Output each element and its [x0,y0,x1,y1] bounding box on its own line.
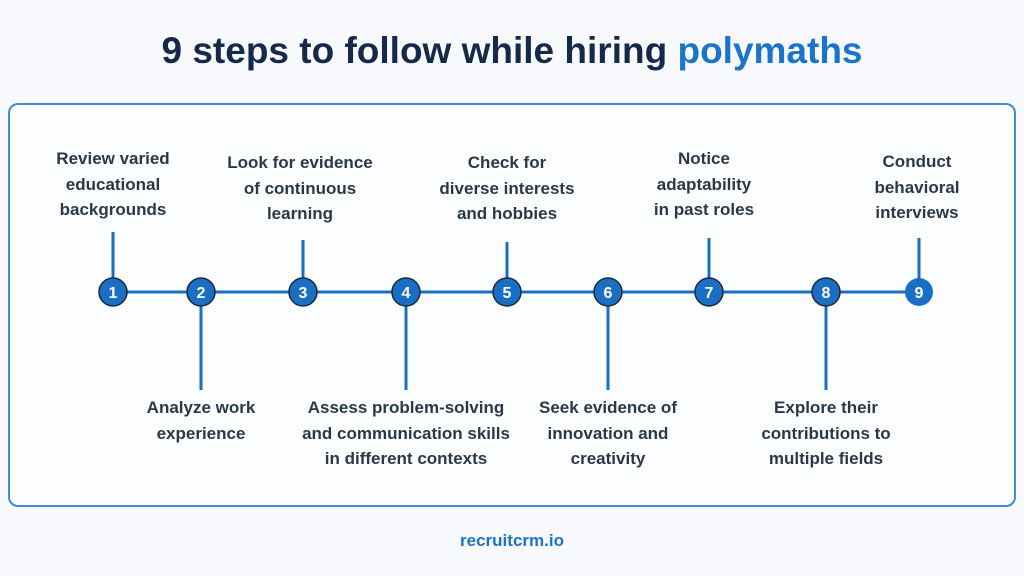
timeline chart: 8 [822,285,831,302]
step 7 label: in past roles [654,200,754,219]
step 2 label: experience [157,424,245,442]
step 3 label: of continuous [244,178,356,198]
step 1 label: backgrounds [60,200,166,219]
step 8 label: contributions to [761,424,891,442]
title: 9 steps to follow while hiring polymaths [161,30,863,71]
step 5 label: and hobbies [457,204,557,223]
step 9 label: Conduct [883,152,951,171]
step 6 label [539,398,678,468]
step 5 label [439,153,575,223]
timeline chart: 7 [705,285,714,302]
step 2 label: Analyze work [147,398,255,417]
step 4 label: Assess problem-solving [308,398,504,417]
step 7 label: Notice [678,149,730,168]
step 4 label: in different contexts [325,449,487,468]
step 7 label [654,149,754,219]
timeline chart: 9 [915,285,924,302]
step 3 label [227,153,373,223]
step 1 label: educational [66,174,160,194]
step 8 label: Explore their [774,398,878,417]
step 3 label: Look for evidence [227,153,373,172]
step 6 label: innovation and [548,424,668,442]
step 6 label: creativity [571,449,645,468]
step 4 label: and communication skills [302,424,510,442]
step 9 label: interviews [875,203,959,222]
timeline chart: 5 [503,285,512,302]
step 7 label: adaptability [657,174,751,194]
step 2 label [147,398,256,442]
step 6 label: Seek evidence of [539,398,677,417]
step 1 label [56,149,170,219]
step 8 label: multiple fields [769,449,883,468]
step 4 label [302,398,510,468]
step 9 label: behavioral [874,178,960,196]
step 8 label [761,398,891,468]
timeline chart: 3 [299,285,308,302]
panel: steps timeline [8,103,1016,507]
footer: recruitcrm.io [460,531,564,550]
step 5 label: diverse interests [439,178,575,198]
timeline chart: 6 [604,285,613,302]
step 1 label: Review varied [56,149,170,168]
timeline chart: 2 [197,285,206,302]
timeline chart: 1 [109,285,118,302]
step 5 label: Check for [468,153,546,172]
step 3 label: learning [267,204,333,223]
timeline chart: 4 [402,285,411,302]
step 9 label [874,152,960,222]
